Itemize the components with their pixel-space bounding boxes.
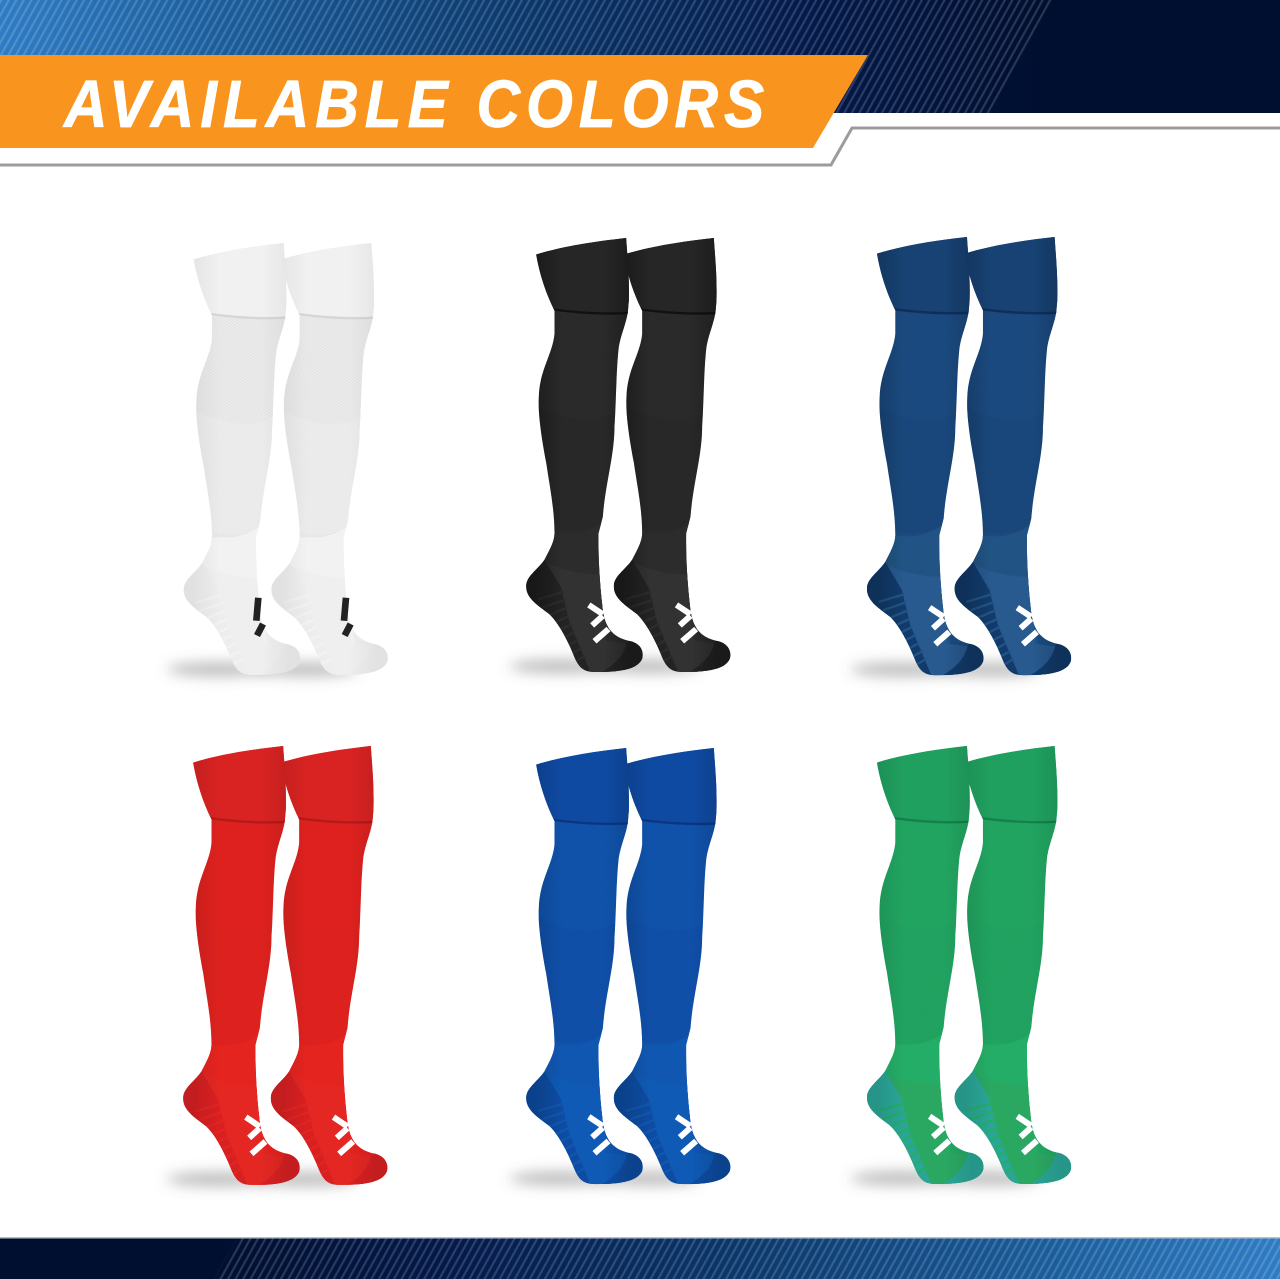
- left red sock: [176, 739, 310, 1190]
- left white sock: [177, 236, 310, 680]
- left black sock: [519, 231, 653, 677]
- logo marks: [930, 1116, 1037, 1153]
- sock pair: black: [509, 231, 740, 677]
- left blue sock: [519, 741, 653, 1189]
- logo marks: [246, 1117, 353, 1154]
- right navy sock: [948, 230, 1081, 680]
- right red sock: [264, 739, 397, 1190]
- sock pair: white: [167, 236, 398, 680]
- sock pair: royal blue: [509, 741, 740, 1189]
- right white sock: [265, 236, 398, 680]
- logo marks: [930, 608, 1037, 644]
- logo marks: [256, 598, 351, 636]
- sock pair: red: [166, 739, 397, 1190]
- header outline stroke: [0, 128, 1280, 165]
- right green sock: [948, 739, 1081, 1189]
- header band: [0, 0, 1280, 113]
- logo marks: [589, 1117, 696, 1153]
- sock pair: green: [850, 739, 1081, 1189]
- heading banner: [0, 55, 868, 148]
- left green sock: [860, 739, 994, 1189]
- footer band: [0, 1237, 1280, 1279]
- left navy sock: [860, 230, 994, 680]
- title: AVAILABLE COLORS: [62, 66, 764, 142]
- logo marks: [589, 605, 696, 641]
- right black sock: [607, 231, 740, 677]
- right blue sock: [607, 741, 740, 1189]
- sock pair: navy: [850, 230, 1081, 680]
